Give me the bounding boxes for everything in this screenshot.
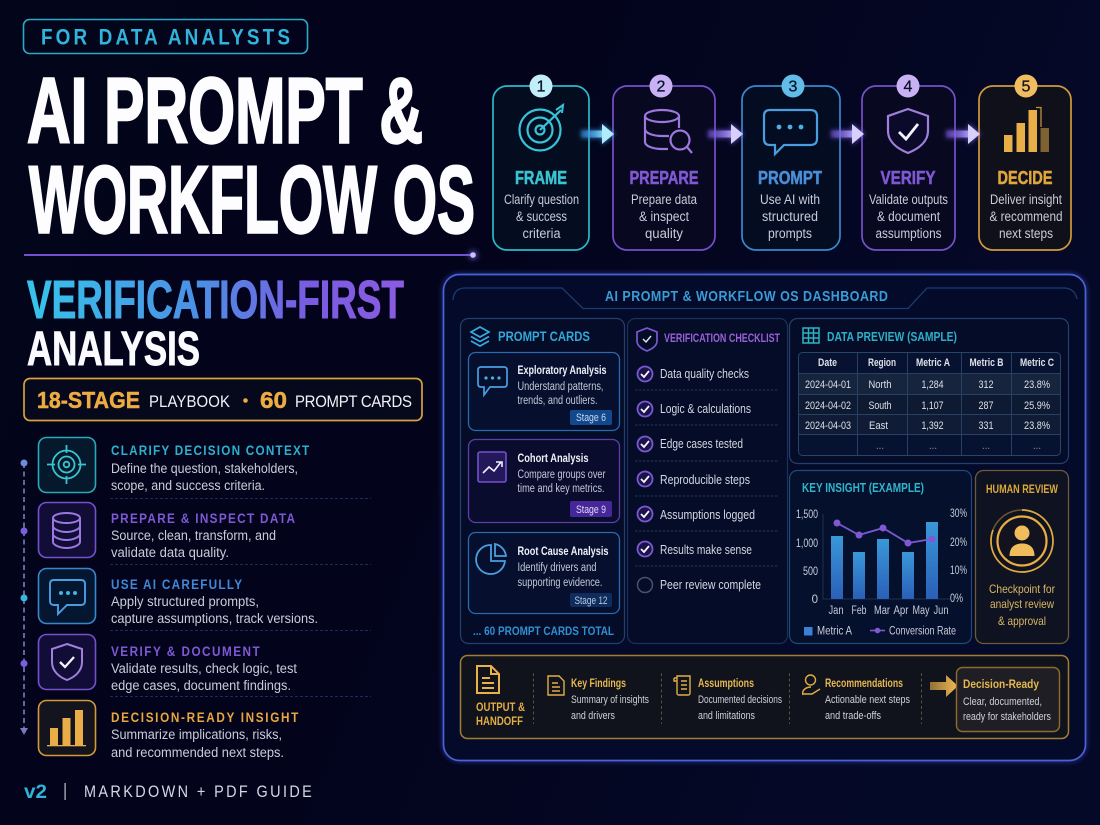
step badge 4: 4 [904,78,913,96]
bar chart: 1,000 [796,538,818,550]
data table: Metric A [916,357,950,369]
checklist items: Reproducible steps [660,473,750,487]
step badge 3 [782,74,804,98]
step badge 5 [1014,74,1038,98]
dashboard title: AI PROMPT & WORKFLOW OS DASHBOARD [605,288,888,304]
output item: key findings: Key Findings [571,678,626,690]
data table: 2024-04-02 [805,400,851,412]
list item: use AI: Apply structured prompts, [111,594,259,609]
list item: clarify: Define the question, stakeholders, [111,461,298,476]
icon: shield check [888,109,928,153]
footer version: v2 [24,782,47,803]
list item: verify: VERIFY & DOCUMENT [111,643,260,659]
step badge 2 [650,74,672,98]
bar chart: Jan [828,605,844,617]
step badge 5: 5 [1022,78,1031,96]
data table: Metric B [970,357,1004,369]
step 1 frame: criteria [522,226,561,241]
data table: 2024-04-03 [805,420,851,432]
step 2 prepare [613,74,715,250]
stats banner: PLAYBOOK [149,393,230,411]
card: root cause analysis: Root Cause Analysis [518,544,609,558]
arrow 1 to 2 [581,123,615,145]
icon: shield [38,634,96,690]
bar chart: 20% [950,537,967,549]
card: exploratory analysis: trends, and outliers. [518,395,598,407]
panel: human review: HUMAN REVIEW [986,484,1058,496]
bar chart: Feb [852,605,866,617]
list item: decision ready: and recommended next steps. [111,745,284,760]
icon: database [38,502,96,558]
card: exploratory analysis: Stage 6 [576,412,606,424]
output item: assumptions: Documented decisions [698,694,782,706]
output item: recommendations: and trade-offs [825,710,881,722]
card: cohort analysis [468,440,620,522]
card: root cause analysis: Identify drivers and [518,562,596,574]
subtitle [27,270,404,376]
audience badge [24,20,308,54]
list item: verify: Validate results, check logic, test [111,661,297,676]
list item: decision ready: Summarize implications, risks, [111,727,282,742]
stats banner: 60 [260,387,287,413]
step 1 frame: FRAME [515,168,567,188]
step 5 decide: DECIDE [998,168,1052,188]
chart legend: Metric A [817,626,852,638]
data table: 1,284 [922,379,944,391]
list item: prepare: PREPARE & INSPECT DATA [111,510,295,526]
callout: decision-ready: ready for stakeholders [963,711,1051,723]
step 4 verify [862,74,955,250]
bar chart: 500 [803,566,818,578]
bar chart: Jun [934,605,948,617]
icon: shield [637,328,657,351]
bar chart: Apr [894,605,909,617]
bar chart: 30% [950,508,967,520]
output item: key findings: Summary of insights [571,694,649,706]
step 5 decide [979,74,1071,250]
step 4 verify: Validate outputs [869,192,948,207]
panel: human review: & approval [998,614,1046,628]
data table: South [868,400,892,412]
panel: prompt cards: ... 60 PROMPT CARDS TOTAL [473,624,614,638]
panel: key insight chart: KEY INSIGHT (EXAMPLE) [802,480,924,495]
subtitle: VERIFICATION-FIRST [27,270,404,330]
list item: verify: edge cases, document findings. [111,678,291,693]
data table: 1,392 [922,420,944,432]
arrow 3 to 4 [831,123,865,145]
title: AI PROMPT & [27,58,423,162]
card: root cause analysis: Stage 12 [574,595,608,607]
icon: crosshair [38,438,96,492]
list item: use AI [38,568,318,626]
icon: document [477,666,499,693]
data table: 23.8% [1024,379,1050,391]
step 2 prepare: PREPARE [630,168,698,188]
panel: data preview: DATA PREVIEW (SAMPLE) [827,329,957,344]
icon: target [520,105,563,150]
panel: human review: analyst review [990,597,1054,611]
bar chart: 1,500 [796,509,818,521]
step 5 decide: next steps [999,226,1053,241]
callout: decision-ready [956,668,1060,732]
list item: use AI: capture assumptions, track versions. [111,611,318,626]
dashboard [444,274,1086,760]
data table: 2024-04-01 [805,379,851,391]
checklist items: Logic & calculations [660,402,751,416]
panel: key insight chart [790,470,972,644]
data table: ... [929,440,937,452]
data table: 23.8% [1024,420,1050,432]
step badge 2: 2 [657,78,666,96]
data table: Region [868,357,896,369]
checklist items: Peer review complete [660,578,761,592]
panel: output and handoff [460,656,1068,738]
stats banner [24,378,422,420]
step 3 prompt: Use AI with [760,192,820,207]
checklist items [638,366,761,592]
card: cohort analysis: Stage 9 [576,504,606,516]
step 3 prompt [742,74,840,250]
step 4 verify: & document [877,209,940,224]
step badge 4 [896,74,920,98]
panel: output and handoff: OUTPUT & [476,700,525,714]
data table: Date [818,357,837,369]
bar chart: 0% [950,593,963,605]
step 4 verify: assumptions [876,226,942,241]
step 5 decide: Deliver insight [990,192,1062,207]
panel: prompt cards [460,318,624,644]
chart legend [804,626,956,638]
card: root cause analysis: supporting evidence. [518,577,602,589]
icon: database magnifier [645,110,692,153]
arrow to decision-ready [930,675,958,697]
output item: recommendations: Actionable next steps [825,694,910,706]
bar chart [796,508,967,617]
data table: ... [876,440,884,452]
checklist items: Assumptions logged [660,508,755,522]
output item: assumptions: Assumptions [698,678,754,690]
arrow 4 to 5 [946,123,981,145]
step 1 frame [493,74,589,250]
card: exploratory analysis [468,352,620,430]
list item: clarify: scope, and success criteria. [111,478,265,493]
data table: Metric C [1020,357,1054,369]
data table: ... [1033,440,1041,452]
card: root cause analysis [468,532,620,614]
audience badge: FOR DATA ANALYSTS [41,25,290,50]
timeline [20,460,28,735]
step 5 decide: & recommend [990,209,1062,224]
step 2 prepare: quality [645,226,683,241]
panel: human review [976,470,1068,644]
list item: prepare: Source, clean, transform, and [111,528,276,543]
icon: chat bubble [764,110,817,154]
stats banner: 18-STAGE [37,387,140,413]
title [27,58,475,254]
footer version: MARKDOWN + PDF GUIDE [84,783,312,801]
data table: ... [982,440,990,452]
panel: data preview [790,318,1068,464]
list item: clarify [38,438,309,493]
step 2 prepare: & inspect [639,209,689,224]
step 3 prompt: PROMPT [758,168,822,188]
data table: 331 [978,420,994,432]
stats banner: PROMPT CARDS [295,393,412,411]
list item: prepare [38,502,295,560]
output item: key findings: and drivers [571,710,615,722]
card: exploratory analysis: Understand patterns, [518,381,604,393]
output item: assumptions [674,676,782,722]
data table: East [869,420,888,432]
list item: verify [38,634,297,693]
chart legend: Conversion Rate [889,626,956,638]
step badge 1 [530,74,552,98]
output item: key findings [548,676,649,722]
callout: decision-ready: Clear, documented, [963,696,1042,708]
icon: table grid [803,328,819,343]
step 2 prepare: Prepare data [631,192,697,207]
step badge 1: 1 [537,78,546,96]
icon: bar chart [1004,108,1049,152]
step 3 prompt: prompts [768,226,812,241]
list item: prepare: validate data quality. [111,545,229,560]
data table: 312 [978,379,994,391]
panel: verification checklist [628,318,788,644]
card: cohort analysis: Compare groups over [518,469,606,481]
title underline [24,250,478,260]
data table [798,352,1060,456]
panel: verification checklist: VERIFICATION CHECKLIST [664,331,780,345]
checklist items: Edge cases tested [660,437,743,451]
data table: 25.9% [1024,400,1050,412]
list item: use AI: USE AI CAREFULLY [111,576,242,592]
bar chart: Mar [874,605,890,617]
title: WORKFLOW OS [29,146,475,254]
step badge 3: 3 [789,78,798,96]
output item: recommendations: Recommendations [825,678,903,690]
icon: layers [471,327,489,346]
icon: reviewer [991,510,1053,572]
data table: 1,107 [922,400,944,412]
step 3 prompt: structured [762,209,818,224]
bar chart: May [912,605,930,617]
list item: decision ready [38,700,298,760]
panel: prompt cards: PROMPT CARDS [498,329,590,344]
checklist items: Results make sense [660,543,752,557]
step 1 frame: Clarify question [504,192,579,207]
subtitle: ANALYSIS [27,323,200,376]
footer version [24,782,312,803]
output item: assumptions: and limitations [698,710,755,722]
panel: output and handoff: HANDOFF [476,714,523,728]
step 4 verify: VERIFY [880,168,936,188]
icon: bars [38,700,96,756]
bar chart: 0 [812,594,818,606]
card: cohort analysis: time and key metrics. [518,483,604,495]
panel: human review: Checkpoint for [989,582,1055,596]
card: cohort analysis: Cohort Analysis [518,451,589,465]
data table: 287 [978,400,994,412]
bar chart: 10% [950,565,967,577]
output item: recommendations [803,675,910,722]
icon: chat [38,568,96,624]
arrow 2 to 3 [708,123,744,145]
card: exploratory analysis: Exploratory Analysis [518,363,607,377]
callout: decision-ready: Decision-Ready [963,677,1039,691]
data table: North [868,379,892,391]
checklist items: Data quality checks [660,367,749,381]
step 1 frame: & success [516,209,567,224]
list item: decision ready: DECISION-READY INSIGHT [111,709,298,725]
list item: clarify: CLARIFY DECISION CONTEXT [111,442,309,458]
